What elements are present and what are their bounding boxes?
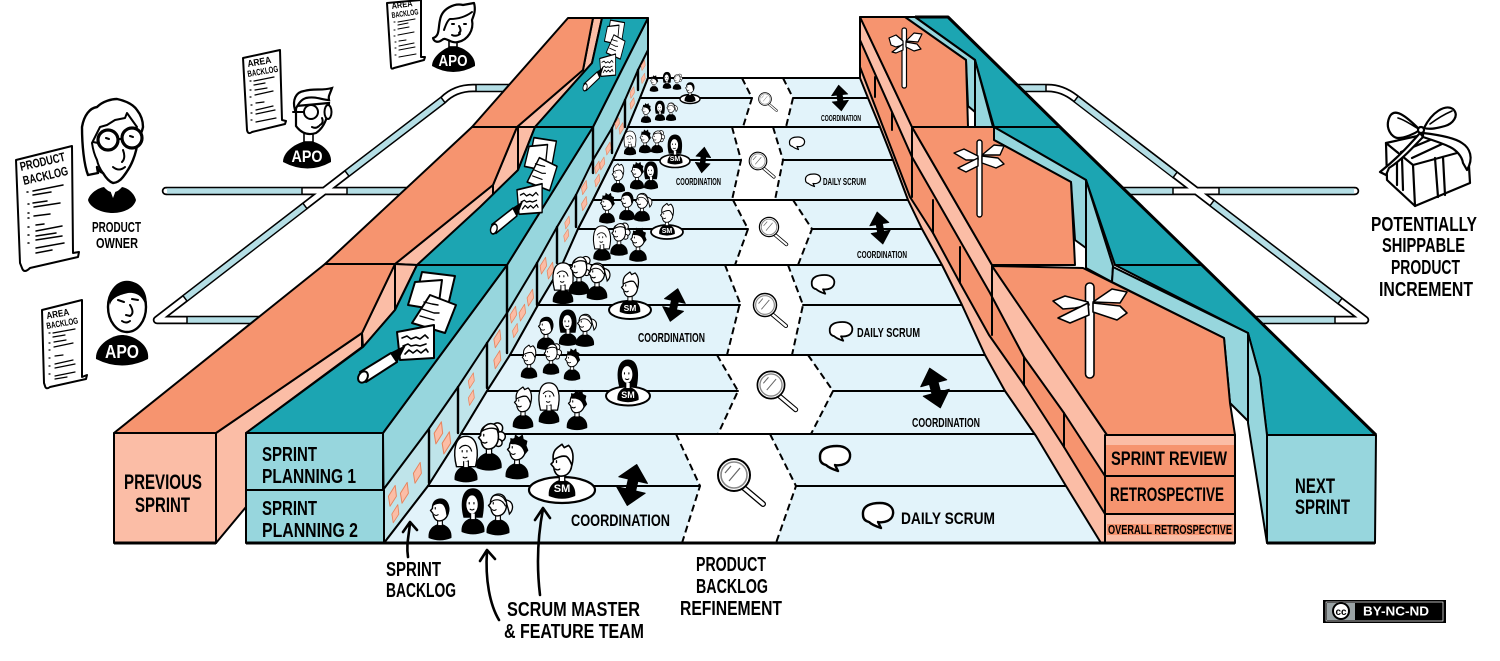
label: potentially shippable product increment: SHIPPABLE — [1382, 235, 1465, 257]
label: product backlog refinement: BACKLOG — [696, 576, 768, 598]
document: area backlog lower left: AREA — [46, 307, 70, 322]
arrow: sprint backlog — [403, 522, 417, 557]
stickies: sprint backlog — [388, 60, 645, 523]
label: next sprint: NEXT — [1295, 475, 1335, 498]
icon: signpost middle — [954, 140, 1004, 217]
white bands: product backlog refinement — [676, 78, 833, 543]
label: coordination row 3: COORDINATION — [857, 250, 907, 261]
label: product owner: PRODUCT — [92, 219, 141, 236]
label: potentially shippable product increment: PRODUCT — [1391, 257, 1460, 279]
panel: previous sprint block — [114, 18, 602, 543]
label: daily scrum row 2: DAILY SCRUM — [823, 177, 866, 188]
label: product backlog refinement: REFINEMENT — [680, 598, 782, 620]
badge: creative commons BY-NC-ND: cc — [1335, 607, 1347, 618]
panel: next sprint: SPRINT — [1295, 496, 1350, 519]
label: scrum master and feature team: & FEATURE TEAM — [504, 621, 644, 643]
label: scrum master and feature team: SCRUM MASTER — [507, 599, 640, 621]
label: scrum master and feature team — [504, 599, 644, 643]
icon: notes and pen, front — [356, 272, 456, 384]
row 1: back sprint team — [641, 72, 850, 123]
label: previous sprint: PREVIOUS — [124, 471, 202, 494]
panel: sprint planning top surfaces — [246, 18, 648, 433]
label: sprint backlog: SPRINT — [386, 559, 441, 581]
label: sprint planning 1: SPRINT — [262, 444, 317, 466]
document: product backlog: BACKLOG — [22, 164, 69, 188]
document: area backlog lower left — [42, 300, 87, 388]
person: area product owner lower left: APO — [105, 342, 139, 362]
person: area product owner middle: APO — [292, 147, 322, 166]
label: SM row 5: SM — [621, 390, 635, 400]
panel: retrospective — [1105, 476, 1235, 514]
row 2 sprint team — [611, 130, 821, 192]
label: SM row 4: SM — [624, 303, 636, 313]
label: SM row 6: SM — [554, 483, 570, 495]
document: area backlog middle — [243, 50, 286, 133]
person: area product owner middle — [283, 88, 332, 168]
label: coordination row 5: COORDINATION — [912, 415, 980, 430]
label: overall retrospective: OVERALL RETROSPECTIVE — [1108, 522, 1232, 537]
panel: sprint planning 1: PLANNING 1 — [262, 466, 356, 488]
document: area backlog middle: BACKLOG — [247, 64, 279, 79]
label: product owner: OWNER — [96, 235, 138, 252]
badge: creative commons BY-NC-ND — [1323, 600, 1446, 623]
panel: sprint planning 2 — [246, 490, 384, 543]
icon: notes and pen, back — [582, 20, 625, 92]
document: area backlog middle: AREA — [247, 55, 272, 70]
label: coordination row 4: COORDINATION — [638, 330, 705, 345]
front face: previous sprint — [114, 433, 216, 543]
label: potentially shippable product increment — [1371, 214, 1478, 301]
document: product backlog — [16, 146, 79, 271]
whiteboards on wall — [383, 50, 648, 543]
panel: right deck teal and strips — [904, 17, 1376, 543]
label: sprint backlog — [386, 559, 456, 602]
label: sprint review: SPRINT REVIEW — [1111, 449, 1227, 470]
label: sprint backlog: BACKLOG — [386, 580, 456, 602]
person: area product owner lower left — [96, 281, 148, 366]
person: area product owner top — [432, 3, 475, 72]
label: SM row 3: SM — [662, 228, 672, 235]
row 3 sprint team — [593, 192, 892, 262]
label: coordination row 2: COORDINATION — [676, 177, 721, 188]
panel: sprint planning 1 — [246, 433, 383, 490]
label: sprint: SPRINT — [135, 494, 190, 517]
label: coordination row 1: COORDINATION — [821, 114, 861, 123]
panel: review wall and strips — [860, 17, 1107, 543]
arrow: feature team — [480, 550, 499, 620]
panel: sprint floor — [384, 78, 1105, 543]
panel: next sprint — [1267, 435, 1376, 543]
label: product backlog refinement — [680, 554, 782, 620]
row 4 sprint team — [537, 256, 852, 350]
label: SM row 2: SM — [670, 156, 680, 163]
label: retrospective: RETROSPECTIVE — [1110, 485, 1224, 506]
label: sprint planning 2: SPRINT — [262, 498, 317, 520]
person: product owner — [82, 99, 143, 213]
label: product owner — [92, 219, 141, 252]
row 6: front sprint team — [428, 423, 893, 540]
pipe: left delivery rails — [157, 84, 520, 324]
panel: sprint planning 2: PLANNING 2 — [262, 520, 358, 542]
label: product backlog refinement: PRODUCT — [696, 554, 766, 576]
label: daily scrum row 4: DAILY SCRUM — [857, 325, 920, 340]
icon: signpost front — [1053, 283, 1127, 378]
panel: review top surfaces — [860, 17, 1235, 435]
icon: signpost back — [889, 28, 922, 88]
badge: creative commons BY-NC-ND: BY-NC-ND — [1363, 604, 1429, 618]
icon: gift box — [1380, 108, 1471, 206]
panel: overall retrospective — [1105, 514, 1235, 543]
icon: notes and pen, middle — [489, 138, 557, 235]
row 5 sprint team — [513, 344, 953, 430]
label: coordination row 6: COORDINATION — [571, 511, 670, 530]
person: area product owner top: APO — [438, 53, 468, 70]
document: area backlog top: BACKLOG — [391, 7, 419, 20]
label: daily scrum row 6: DAILY SCRUM — [901, 509, 995, 528]
arrow: scrum master — [535, 508, 550, 595]
panel: sprint planning wall side — [383, 18, 648, 543]
document: area backlog lower left: BACKLOG — [46, 316, 79, 331]
document: product backlog: PRODUCT — [19, 150, 67, 174]
document: area backlog top — [387, 0, 425, 69]
label: potentially shippable product increment: INCREMENT — [1379, 279, 1473, 301]
panel: sprint review — [1105, 435, 1235, 476]
pipe: right delivery rails — [1015, 84, 1365, 324]
